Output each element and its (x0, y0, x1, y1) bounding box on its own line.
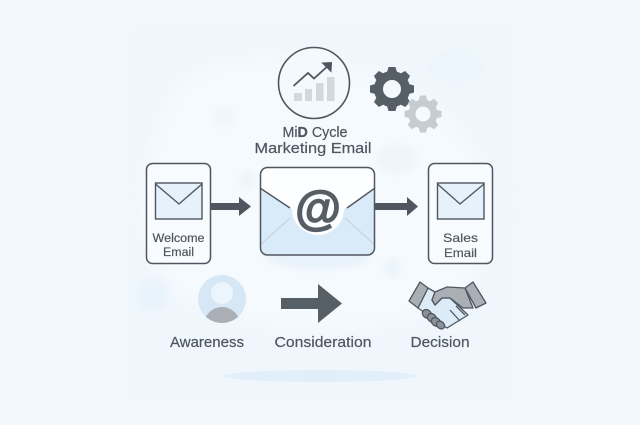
icon: dark gear (370, 67, 414, 111)
card: Welcome Email (146, 164, 210, 264)
heading: Mid Cycle Marketing Email: Marketing Email (254, 141, 372, 157)
icon: handshake (409, 282, 486, 331)
icon: at sign: @ (295, 181, 341, 234)
arrow: welcome to main (211, 197, 251, 216)
card: Welcome Email: Welcome (152, 233, 204, 245)
infographic (142, 46, 494, 382)
arrow: consideration (281, 284, 342, 323)
label: Consideration: Consideration (274, 334, 372, 351)
icon: person avatar (198, 275, 246, 323)
icon: welcome envelope (156, 183, 202, 219)
icon: growth chart in circle (278, 48, 350, 118)
label: Decision: Decision (410, 334, 470, 351)
arrow: main to sales (375, 197, 418, 216)
ground shadow (223, 370, 417, 382)
icon: light gear (404, 96, 442, 132)
card: Sales Email: Sales (443, 231, 478, 245)
card: Sales Email (428, 164, 492, 264)
card: Welcome Email: Email (163, 247, 194, 259)
main envelope with at sign (260, 167, 375, 255)
icon: sales envelope (438, 183, 484, 219)
heading: Mid Cycle Marketing Email: MiD Cycle (282, 125, 348, 141)
heading: Mid Cycle Marketing Email (254, 125, 372, 157)
card: Sales Email: Email (444, 246, 477, 260)
label: Awareness: Awareness (170, 334, 244, 351)
